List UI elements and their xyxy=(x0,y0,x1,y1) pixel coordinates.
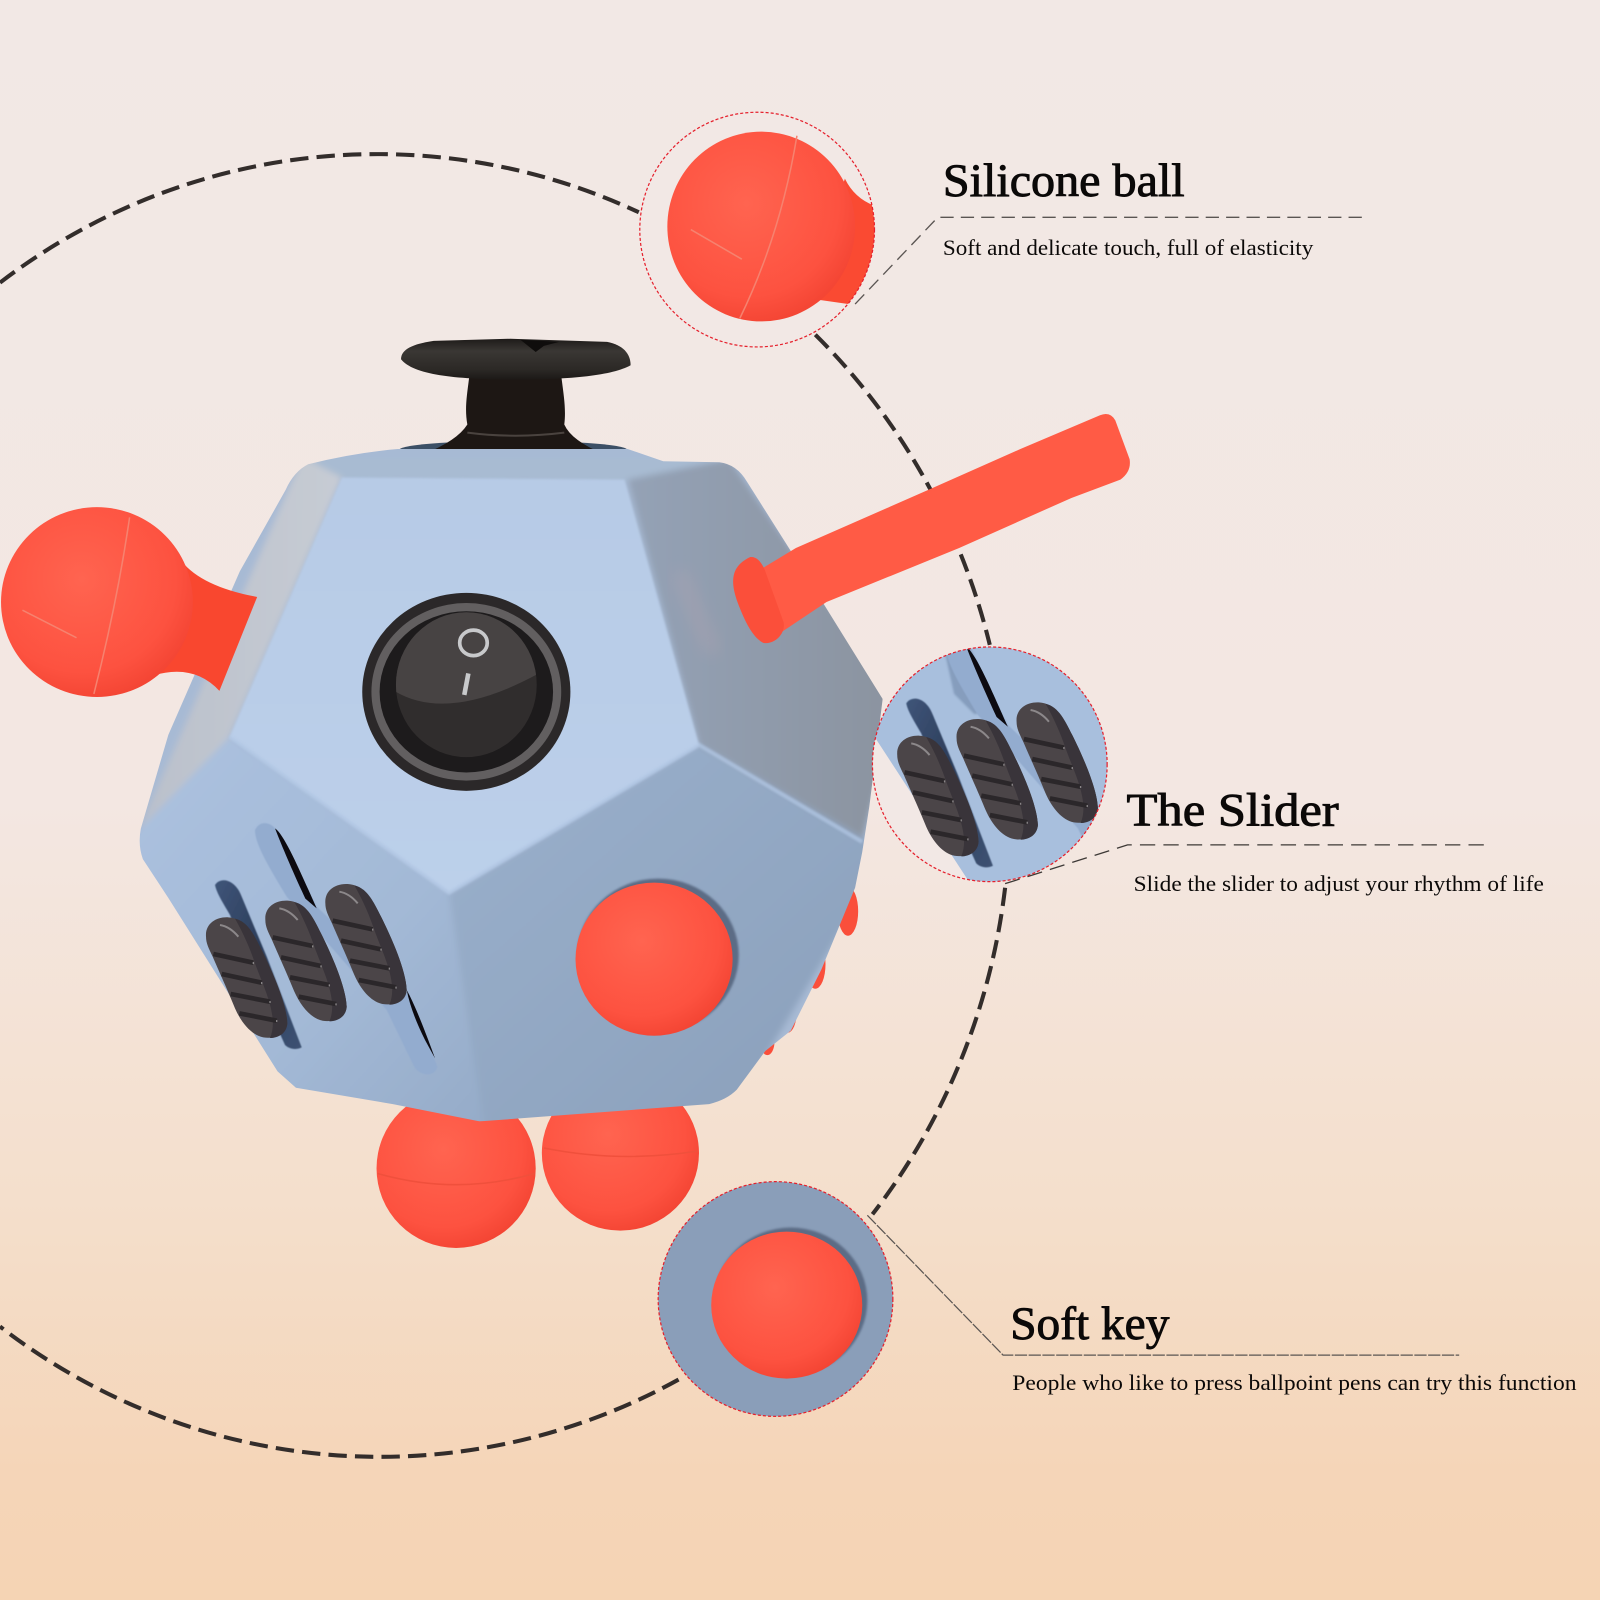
label: the slider: Slide the slider to adjust your rhythm of life xyxy=(1134,871,1544,896)
label: the slider: The Slider xyxy=(1127,785,1339,837)
label: silicone ball: Silicone ball xyxy=(943,155,1185,207)
left silicone ball xyxy=(1,507,257,697)
callout circle: silicone ball xyxy=(640,112,888,347)
dashed orbit ring xyxy=(0,154,1005,1457)
side sliders xyxy=(206,823,437,1074)
label: soft key: Soft key xyxy=(1010,1298,1170,1350)
label: the slider xyxy=(1005,785,1544,896)
silicone bumps on the far side xyxy=(760,887,858,1055)
bottom silicone balls xyxy=(377,1076,699,1248)
dodecahedron body xyxy=(122,439,898,1133)
joystick xyxy=(399,339,631,459)
label: silicone ball: Soft and delicate touch, full of elasticity xyxy=(943,235,1314,260)
callout circle: slider xyxy=(872,646,1108,882)
rocker button xyxy=(393,610,541,759)
callout circle: soft key xyxy=(658,1182,893,1416)
paddle toggle xyxy=(733,414,1130,643)
rocker switch xyxy=(362,593,570,791)
label: soft key xyxy=(867,1215,1577,1395)
label: silicone ball xyxy=(855,155,1363,304)
switch markings xyxy=(460,630,487,695)
label: soft key: People who like to press ballpoint pens can try this function xyxy=(1012,1370,1577,1395)
soft key on cube xyxy=(576,879,739,1036)
body faces xyxy=(122,439,898,1133)
